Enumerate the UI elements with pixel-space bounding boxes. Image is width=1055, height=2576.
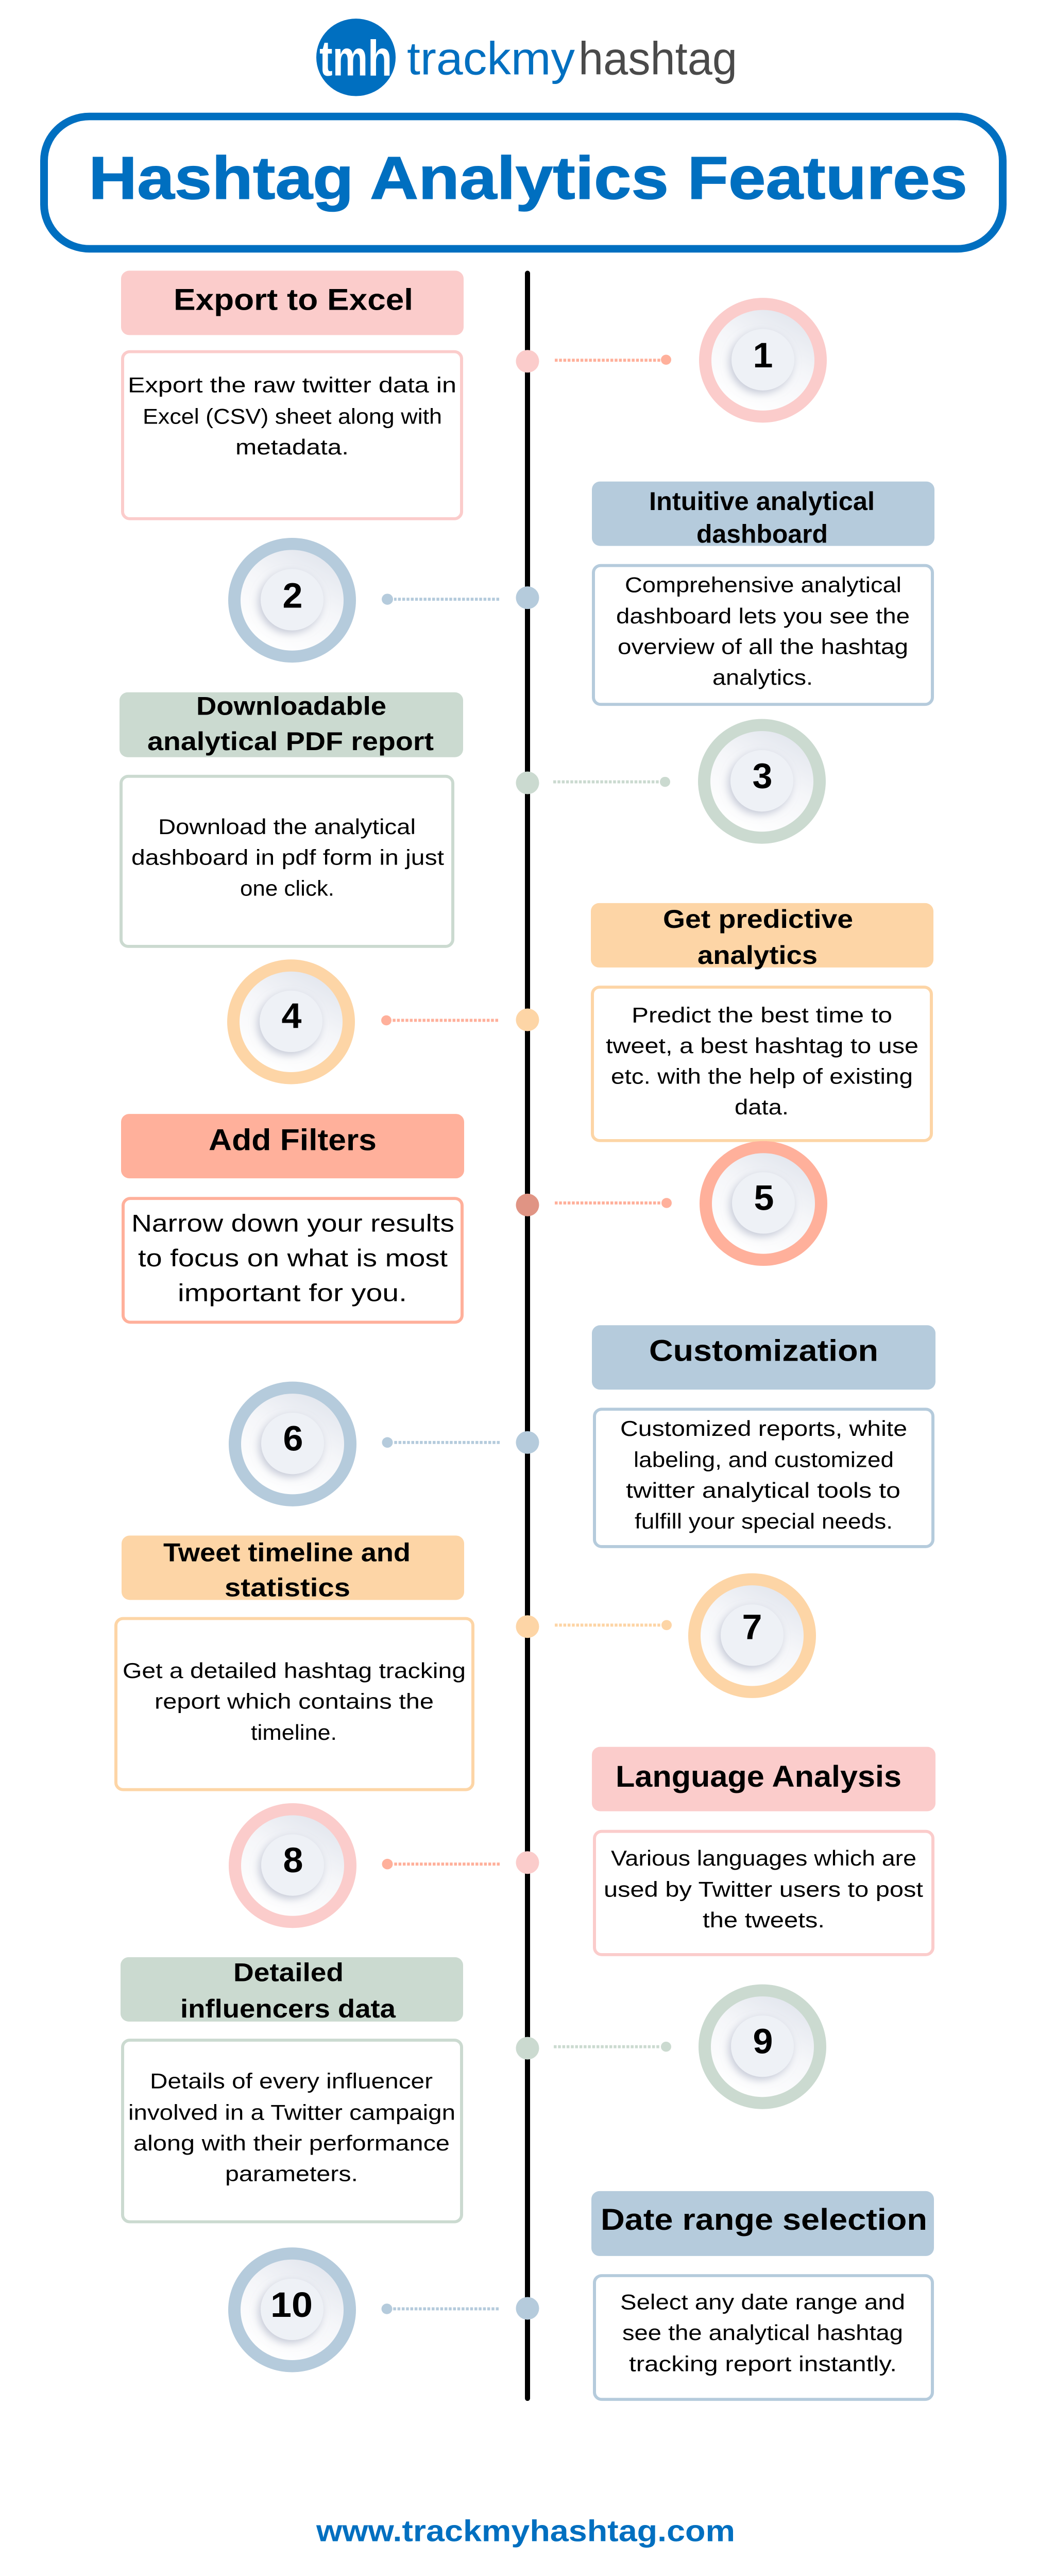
description: twitter analytical tools to <box>626 1479 900 1503</box>
number badge 5: 5 <box>754 1178 774 1217</box>
heading: Customization <box>649 1333 878 1367</box>
description: Export the raw twitter data in <box>128 374 456 398</box>
item 3 panel: Downloadable analytical PDF report <box>120 691 826 946</box>
description: Customized reports, white <box>620 1417 907 1441</box>
heading: analytical PDF report <box>147 727 434 756</box>
number badge 3 <box>698 719 826 844</box>
description <box>121 776 453 946</box>
number badge 10: 10 <box>270 2285 313 2325</box>
description: timeline. <box>251 1721 337 1745</box>
icon: tmh logo badge: tmh <box>319 30 392 86</box>
heading: Detailed <box>233 1958 344 1987</box>
description: dashboard in pdf form in just <box>131 846 444 870</box>
node and connector <box>381 2297 539 2319</box>
description: Excel (CSV) sheet along with <box>143 405 442 429</box>
number badge 8 <box>229 1803 356 1928</box>
number badge 10 <box>228 2247 356 2372</box>
item 2 panel: Intuitive analytical dashboard <box>228 482 934 704</box>
heading <box>121 1957 463 2023</box>
description <box>116 1619 473 1790</box>
heading: Export to Excel <box>174 282 413 316</box>
item 6 panel: Customization <box>229 1325 935 1547</box>
description: involved in a Twitter campaign <box>128 2101 455 2125</box>
description: Select any date range and <box>620 2291 905 2314</box>
node and connector <box>516 2037 671 2060</box>
number badge 7 <box>688 1573 816 1698</box>
description <box>594 1409 933 1547</box>
number badge 9 <box>699 1985 826 2109</box>
number badge 3: 3 <box>753 756 772 795</box>
number badge 6: 6 <box>283 1418 303 1458</box>
heading: Date range selection <box>601 2202 927 2236</box>
item 5 panel: Add Filters <box>121 1114 827 1322</box>
description: tracking report instantly. <box>629 2352 897 2376</box>
item 7 panel: Tweet timeline and statistics <box>116 1535 816 1790</box>
node and connector <box>516 772 670 794</box>
heading: Intuitive analytical <box>649 487 875 516</box>
heading: Add Filters <box>209 1123 377 1157</box>
heading: statistics <box>225 1573 350 1602</box>
heading: Get predictive <box>663 904 853 934</box>
description: labeling, and customized <box>634 1448 894 1472</box>
description: important for you. <box>178 1280 407 1307</box>
number badge 2: 2 <box>283 575 302 616</box>
description <box>123 1198 462 1322</box>
timeline spine <box>525 270 530 2401</box>
description <box>594 2276 932 2399</box>
description: to focus on what is most <box>138 1245 448 1272</box>
description: overview of all the hashtag <box>618 635 908 659</box>
logo wordmark: hashtag <box>578 33 737 84</box>
number badge 2 <box>228 538 356 663</box>
node and connector <box>382 1851 539 1874</box>
heading <box>592 1325 935 1389</box>
heading <box>121 1114 464 1178</box>
heading: analytics <box>697 941 818 970</box>
footer url: www.trackmyhashtag.com <box>316 2514 735 2548</box>
number badge 1: 1 <box>753 335 773 375</box>
description: Get a detailed hashtag tracking <box>123 1659 466 1683</box>
node and connector <box>516 350 671 372</box>
description <box>593 566 932 704</box>
title: Hashtag Analytics Features <box>89 145 967 212</box>
number badge 6 <box>229 1382 356 1506</box>
description: tweet, a best hashtag to use <box>606 1034 918 1058</box>
description: metadata. <box>235 435 349 460</box>
description: parameters. <box>225 2162 358 2186</box>
description: along with their performance <box>133 2131 450 2156</box>
description: used by Twitter users to post <box>604 1878 923 1902</box>
description: analytics. <box>712 666 813 690</box>
number badge 4: 4 <box>282 996 302 1036</box>
item 8 panel: Language Analysis <box>229 1747 935 1955</box>
description <box>594 1832 933 1955</box>
description: report which contains the <box>155 1690 434 1714</box>
description: the tweets. <box>703 1909 825 1933</box>
heading <box>591 2191 934 2256</box>
logo wordmark <box>407 33 737 84</box>
description: fulfill your special needs. <box>635 1510 893 1534</box>
number badge 8: 8 <box>283 1840 303 1880</box>
description: Comprehensive analytical <box>625 573 901 597</box>
item 9 panel: Detailed influencers data <box>121 1957 826 2222</box>
heading <box>591 903 933 970</box>
heading: dashboard <box>696 519 828 549</box>
number badge 4 <box>227 959 355 1084</box>
number badge 5 <box>700 1141 827 1266</box>
node and connector <box>516 1615 672 1638</box>
node and connector <box>381 1009 539 1031</box>
description: etc. with the help of existing <box>611 1065 913 1089</box>
description: dashboard lets you see the <box>616 604 910 629</box>
node and connector <box>382 1431 539 1454</box>
description <box>123 352 462 519</box>
number badge 7: 7 <box>742 1607 762 1647</box>
description: Predict the best time to <box>632 1004 892 1027</box>
heading <box>592 482 934 549</box>
item 1 panel: Export to Excel <box>121 270 827 519</box>
heading: influencers data <box>180 1994 396 2023</box>
description: Narrow down your results <box>131 1210 454 1237</box>
heading <box>122 1535 464 1602</box>
description: data. <box>735 1096 789 1120</box>
logo wordmark: trackmy <box>407 33 575 84</box>
description <box>123 2040 462 2222</box>
description: Details of every influencer <box>150 2070 433 2094</box>
heading <box>592 1747 935 1811</box>
heading <box>121 270 464 335</box>
description: one click. <box>240 877 334 901</box>
title <box>44 116 1002 249</box>
description: Download the analytical <box>158 816 416 839</box>
description <box>592 987 931 1141</box>
item 4 panel: Get predictive analytics <box>227 903 933 1141</box>
item 10 panel: Date range selection <box>228 2191 934 2399</box>
number badge 1 <box>699 298 827 422</box>
heading <box>120 691 463 757</box>
icon: tmh logo badge <box>316 19 396 96</box>
heading: Language Analysis <box>616 1759 901 1793</box>
heading: Downloadable <box>196 691 386 721</box>
node and connector <box>382 586 539 609</box>
logo <box>316 19 737 96</box>
description: see the analytical hashtag <box>622 2321 903 2345</box>
node and connector <box>516 1194 672 1216</box>
heading: Tweet timeline and <box>163 1538 411 1567</box>
description: Various languages which are <box>611 1847 916 1871</box>
number badge 9: 9 <box>753 2021 773 2061</box>
